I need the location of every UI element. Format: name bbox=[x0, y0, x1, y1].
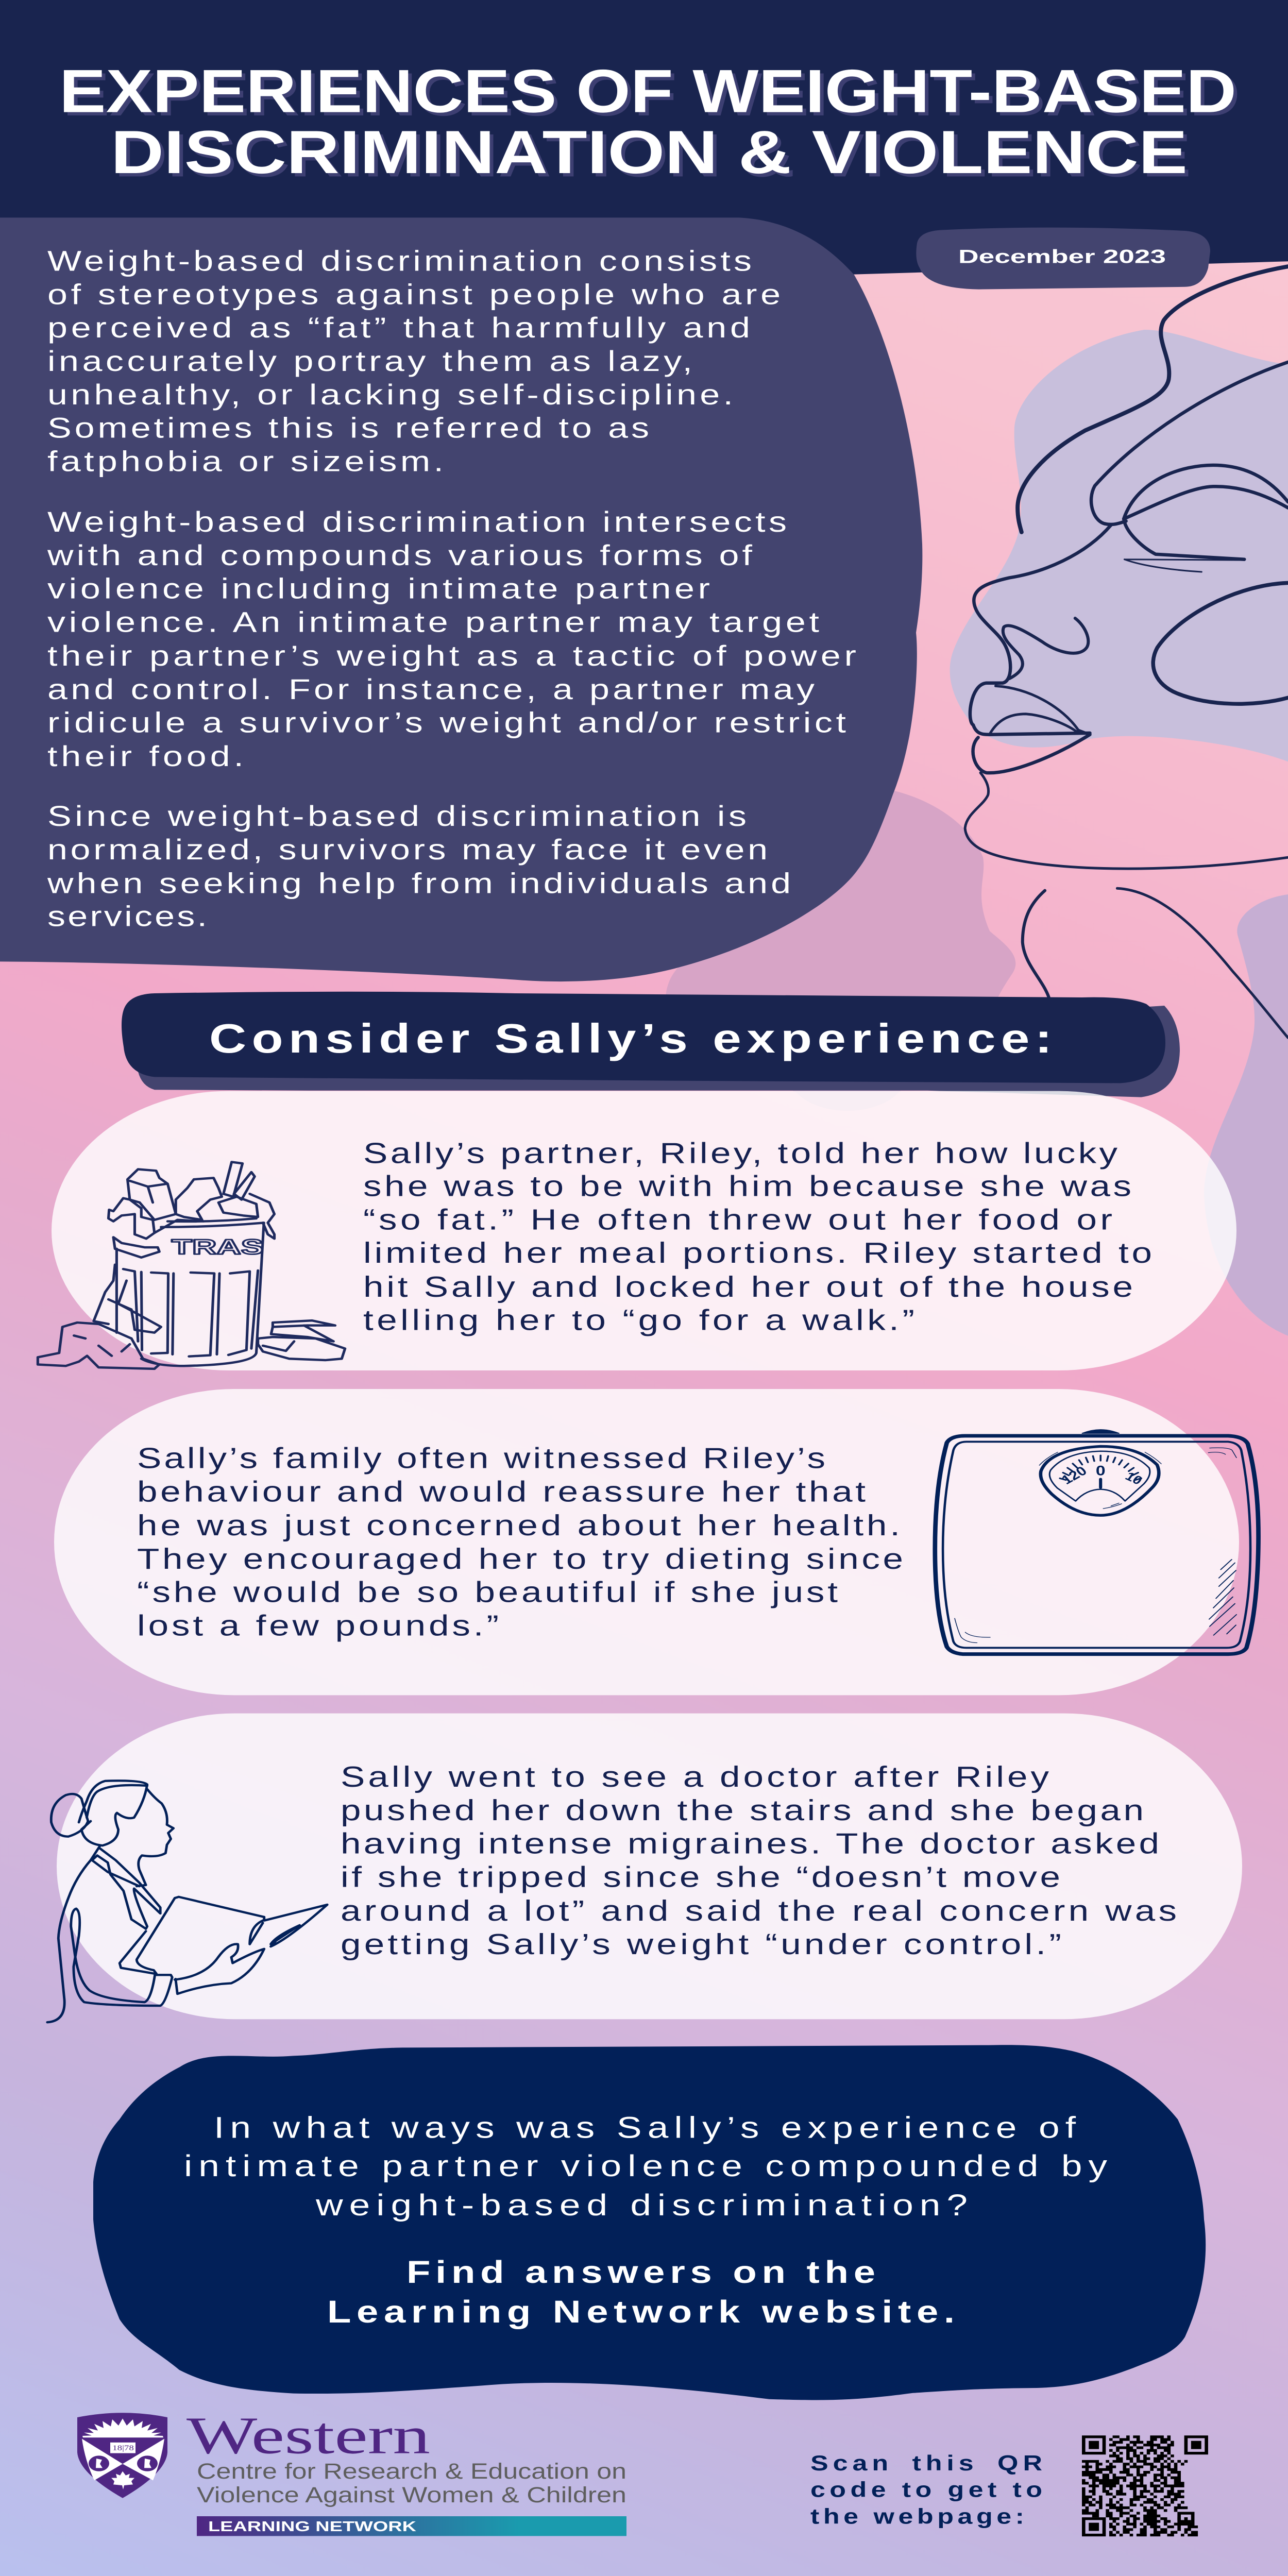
logo: Western Learning Network: Violence Against Women & Children bbox=[197, 2483, 626, 2507]
icon: overflowing trash can: TRAS bbox=[172, 1235, 264, 1259]
text: story one: she was to be with him because she was bbox=[363, 1170, 1131, 1202]
text: story two: Sally’s family often witnessed Riley’s bbox=[137, 1442, 825, 1475]
text: paragraph three: services. bbox=[47, 901, 207, 933]
text: story one: limited her meal portions. Riley started to bbox=[363, 1236, 1152, 1269]
icon: bathroom scale: 0 bbox=[1096, 1463, 1106, 1479]
text: paragraph two: violence including intimate partner bbox=[47, 573, 710, 605]
text: story three: if she tripped since she “doesn’t move bbox=[341, 1860, 1060, 1893]
date badge bbox=[916, 228, 1210, 290]
icon: overflowing trash can bbox=[38, 1162, 345, 1369]
text: story one: “so fat.” He often threw out her food or bbox=[363, 1203, 1112, 1236]
text: question: weight-based discrimination? bbox=[315, 2189, 968, 2222]
text: QR prompt: the webpage: bbox=[810, 2504, 1024, 2528]
text: QR prompt: code to get to bbox=[810, 2477, 1042, 2501]
icon: doctor holding a clipboard bbox=[47, 1781, 327, 2022]
text: paragraph two: ridicule a survivor’s weight and/or restrict bbox=[47, 707, 846, 739]
blob: lower mauve bbox=[666, 787, 1015, 1111]
QR code bbox=[1082, 2435, 1208, 2536]
text: paragraph three: normalized, survivors may face it even bbox=[47, 834, 768, 866]
blob: right lavender bbox=[1204, 894, 1288, 1336]
text: paragraph two: violence. An intimate partner may target bbox=[47, 606, 819, 638]
text: paragraph two: and control. For instance, a partner may bbox=[47, 673, 815, 705]
text: story three: Sally went to see a doctor after Riley bbox=[341, 1760, 1049, 1793]
panel: introduction bbox=[0, 217, 922, 981]
text: story one: Sally’s partner, Riley, told her how lucky bbox=[363, 1137, 1118, 1170]
icon: bathroom scale bbox=[935, 1430, 1259, 1654]
icon: Western crest: 18|78 bbox=[112, 2444, 134, 2452]
text: question: In what ways was Sally’s experience of bbox=[214, 2111, 1076, 2145]
text: paragraph one: of stereotypes against people who are bbox=[47, 279, 781, 311]
icon: Western crest bbox=[77, 2413, 167, 2498]
title bbox=[59, 58, 1236, 187]
panel: story three bbox=[47, 1714, 1242, 2022]
text: story three: pushed her down the stairs and she began bbox=[341, 1794, 1144, 1826]
text: QR prompt bbox=[810, 2451, 1042, 2528]
text: story two: They encouraged her to try dieting since bbox=[137, 1543, 903, 1575]
heading: consider Sally's experience bbox=[122, 992, 1165, 1083]
logo: Western Learning Network: Centre for Research & Education on bbox=[197, 2460, 626, 2484]
text: call to action: Find answers on the bbox=[406, 2255, 875, 2290]
text: paragraph one bbox=[47, 245, 781, 478]
panel: reflection question bbox=[93, 2045, 1206, 2400]
text: QR prompt: Scan this QR bbox=[810, 2451, 1042, 2475]
blob: face lavender bbox=[950, 330, 1288, 761]
header band bbox=[0, 0, 1288, 289]
text: story one: telling her to “go for a walk.” bbox=[363, 1303, 914, 1336]
text: question bbox=[184, 2111, 1107, 2222]
logo: Western Learning Network: Western bbox=[187, 2406, 430, 2465]
text: story three: having intense migraines. The doctor asked bbox=[341, 1827, 1159, 1860]
text: paragraph three: when seeking help from individuals and bbox=[47, 868, 791, 900]
text: paragraph two: their food. bbox=[47, 741, 244, 773]
text: paragraph two bbox=[47, 506, 856, 773]
text: paragraph three: Since weight-based discrimination is bbox=[47, 801, 747, 833]
icon: bathroom scale: 10 bbox=[1123, 1470, 1145, 1487]
logo: Western Learning Network: LEARNING NETWORK bbox=[208, 2518, 416, 2534]
text: paragraph two: Weight-based discrimination intersects bbox=[47, 506, 787, 538]
text: story three bbox=[341, 1760, 1177, 1960]
text: call to action bbox=[327, 2255, 955, 2329]
logo: Western Learning Network bbox=[77, 2406, 626, 2536]
text: paragraph two: their partner’s weight as a tactic of power bbox=[47, 640, 856, 672]
text: paragraph three bbox=[47, 801, 791, 933]
text: paragraph two: with and compounds various forms of bbox=[47, 539, 752, 571]
text: story two: he was just concerned about her health. bbox=[137, 1509, 900, 1541]
text: call to action: Learning Network website. bbox=[327, 2294, 955, 2329]
text: paragraph one: inaccurately portray them as lazy, bbox=[47, 346, 692, 377]
line drawing: woman's face bbox=[965, 266, 1288, 1038]
title: DISCRIMINATION & VIOLENCE bbox=[111, 118, 1188, 187]
text: story one bbox=[363, 1137, 1152, 1336]
text: story one: hit Sally and locked her out of the house bbox=[363, 1270, 1133, 1303]
date badge: December 2023 bbox=[958, 246, 1166, 267]
panel: story two bbox=[54, 1389, 1259, 1695]
text: paragraph one: unhealthy, or lacking self-discipline. bbox=[47, 379, 733, 411]
heading: consider Sally's experience: Consider Sally’s experience: bbox=[209, 1016, 1052, 1062]
text: story two: lost a few pounds.” bbox=[137, 1609, 499, 1642]
icon: bathroom scale: 120 bbox=[1058, 1464, 1090, 1487]
text: paragraph one: Weight-based discrimination consists bbox=[47, 245, 752, 277]
text: question: intimate partner violence compounded by bbox=[184, 2149, 1107, 2183]
text: story three: getting Sally’s weight “under control.” bbox=[341, 1928, 1061, 1960]
text: story two: “she would be so beautiful if she just bbox=[137, 1575, 838, 1608]
text: story two: behaviour and would reassure her that bbox=[137, 1475, 866, 1508]
text: story two bbox=[137, 1442, 903, 1642]
heading shadow bbox=[138, 1006, 1180, 1097]
text: paragraph one: perceived as “fat” that harmfully and bbox=[47, 312, 750, 344]
text: story three: around a lot” and said the real concern was bbox=[341, 1894, 1177, 1927]
panel: story one bbox=[38, 1091, 1236, 1370]
text: paragraph one: Sometimes this is referred to as bbox=[47, 412, 649, 444]
text: paragraph one: fatphobia or sizeism. bbox=[47, 446, 444, 478]
